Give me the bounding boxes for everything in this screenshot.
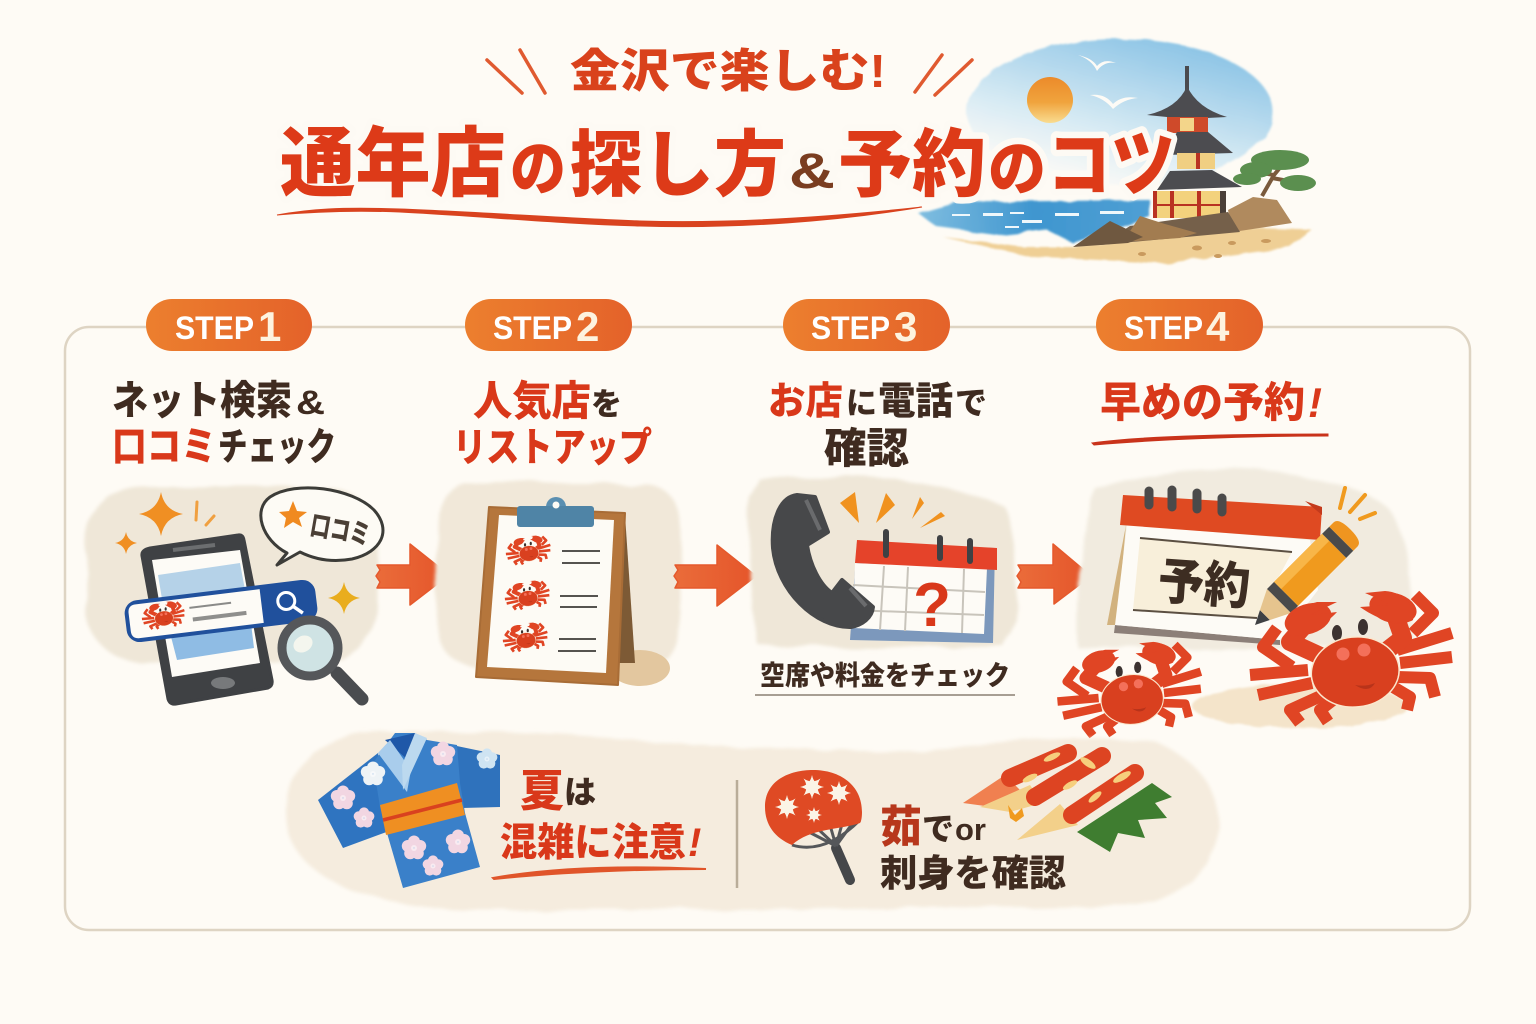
smartphone xyxy=(142,535,272,704)
pencil sparkle ticks xyxy=(1340,488,1375,519)
magnifying glass xyxy=(282,620,362,699)
arrow 1 xyxy=(376,544,449,605)
main title: コツ xyxy=(1047,126,1175,206)
step 3 heading: に xyxy=(846,386,877,421)
backdrop xyxy=(748,475,1018,647)
small crab xyxy=(1057,640,1201,736)
sparkles xyxy=(115,492,360,614)
decorative slash marks xyxy=(487,50,972,95)
予約 label: 予約 xyxy=(1156,553,1252,615)
sand patch xyxy=(1192,684,1408,728)
sky xyxy=(967,39,1273,185)
clip xyxy=(517,497,594,527)
calendar xyxy=(850,532,997,643)
arrow 2 xyxy=(674,545,756,606)
step 3 heading: で xyxy=(955,385,987,421)
pencil xyxy=(1243,518,1362,637)
step 2 badge: 2 xyxy=(576,303,599,350)
step 4 heading: 早めの予約 xyxy=(1100,379,1305,426)
main title: 探し方 xyxy=(570,126,786,206)
bottom panel: seasonal tips xyxy=(288,731,1219,910)
search bar xyxy=(123,578,319,644)
step 2 badge xyxy=(465,299,632,351)
paper xyxy=(487,515,614,673)
step 4 heading xyxy=(1092,379,1328,445)
speech bubble 口コミ xyxy=(261,488,383,565)
text: boiled or sashimi xyxy=(880,803,1066,894)
backdrop xyxy=(1076,469,1412,649)
backdrop xyxy=(288,731,1219,910)
header illustration: Kanazawa seaside pagoda xyxy=(918,39,1316,263)
step 4 badge xyxy=(1096,299,1263,351)
text: boiled or sashimi: で xyxy=(922,811,954,847)
backdrop xyxy=(86,486,378,662)
crab legs on leaf icon xyxy=(963,750,1172,852)
speech bubble 口コミ: 口コミ xyxy=(308,510,372,550)
telephone handset xyxy=(773,495,873,627)
clipboard xyxy=(476,507,625,685)
step 3 heading: 確認 xyxy=(824,425,909,472)
step 3 badge: 3 xyxy=(894,303,917,350)
step 1 heading xyxy=(112,379,336,469)
step 2 heading: を xyxy=(591,387,622,422)
step 2 heading xyxy=(453,378,652,470)
question mark: ? xyxy=(913,571,951,640)
main title xyxy=(280,122,1175,207)
clipboard stand xyxy=(615,515,635,663)
text: summer crowd warning: 夏 xyxy=(520,767,564,816)
backdrop xyxy=(437,483,681,667)
kimono icon xyxy=(318,733,500,888)
step 1 heading: 口コミ xyxy=(112,425,216,469)
main title: の xyxy=(988,136,1046,203)
step 3 heading: 電話 xyxy=(878,381,953,423)
step 1 badge: STEP xyxy=(175,310,254,346)
text: summer crowd warning: 混雑に注意 xyxy=(500,822,686,865)
shadow xyxy=(610,650,670,686)
pine tree xyxy=(1233,150,1316,196)
text: summer crowd warning: ! xyxy=(688,821,701,865)
step 2 badge: STEP xyxy=(493,310,572,346)
sound marks xyxy=(840,492,945,528)
text: boiled or sashimi: or xyxy=(955,812,986,847)
calendar xyxy=(1107,490,1322,645)
text: boiled or sashimi: 茹 xyxy=(880,803,922,852)
large crab xyxy=(1250,588,1452,723)
main title: & xyxy=(789,143,835,199)
step 4 illustration: booking calendar and crabs xyxy=(1057,469,1452,736)
seagulls xyxy=(1078,55,1138,109)
uchiwa fan icon xyxy=(765,770,862,880)
step 4 badge: 4 xyxy=(1206,303,1230,350)
sea xyxy=(918,200,1150,243)
title underline xyxy=(277,207,922,227)
rocks xyxy=(1073,197,1292,247)
sun xyxy=(1027,77,1073,123)
frame panel xyxy=(65,327,1470,930)
underline xyxy=(1092,434,1328,445)
step 3 heading xyxy=(768,381,987,472)
title xyxy=(277,45,1175,227)
step 4 heading: ! xyxy=(1308,379,1322,426)
step 3 heading: お店 xyxy=(768,381,843,423)
step 2 heading: リストアップ xyxy=(453,426,652,470)
step 1 heading: ネット検索 xyxy=(112,379,292,423)
text: summer crowd warning xyxy=(493,767,706,879)
divider xyxy=(736,780,738,888)
text: summer crowd warning: は xyxy=(564,774,596,810)
step 3 badge xyxy=(783,299,950,351)
caption: 空席や料金をチェック xyxy=(760,661,1010,691)
step 3 badge: STEP xyxy=(811,310,890,346)
step 1 badge xyxy=(146,299,312,351)
step 4 badge: STEP xyxy=(1124,310,1203,346)
crab icon in search bar xyxy=(142,601,184,629)
subtitle: 金沢で楽しむ! xyxy=(570,45,886,97)
text: boiled or sashimi: 刺身を確認 xyxy=(880,853,1066,894)
sand xyxy=(943,227,1312,263)
main title: の xyxy=(510,136,566,203)
step 2 illustration: clipboard list xyxy=(437,483,681,686)
main title: 予約 xyxy=(838,123,986,206)
crabs and list lines xyxy=(503,535,600,652)
step 1 heading: チェック xyxy=(218,427,336,469)
step 1 badge: 1 xyxy=(258,303,281,350)
arrow 3 xyxy=(1017,544,1091,604)
step 3 illustration: phone call and calendar xyxy=(748,475,1018,691)
main title: 通年店 xyxy=(280,122,506,207)
pagoda xyxy=(1147,66,1242,218)
step 2 heading: 人気店 xyxy=(473,378,591,424)
step 1 illustration: phone search xyxy=(86,486,383,704)
step 1 heading: & xyxy=(296,384,325,422)
